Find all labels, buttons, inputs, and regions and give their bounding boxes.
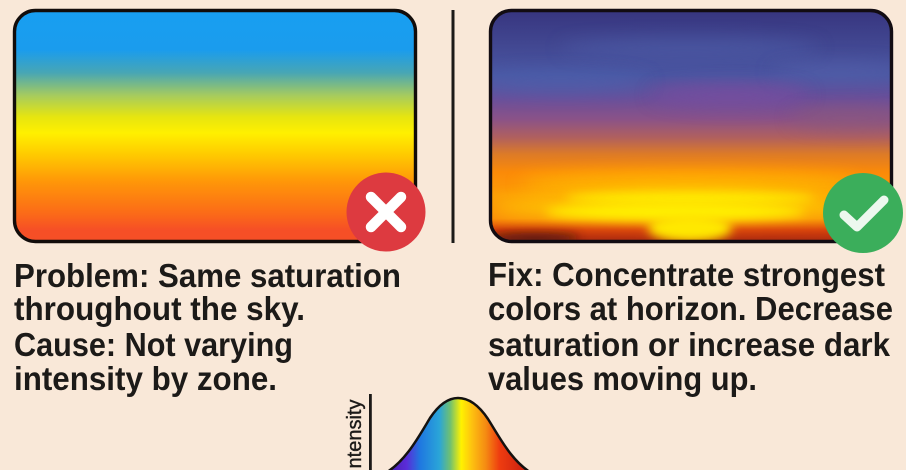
icon: green check badge (823, 173, 903, 253)
text: fix: Fix: Concentrate strongest (488, 256, 885, 293)
panel: problem sky with uniform saturation (14, 10, 416, 242)
text: problem and cause: throughout the sky. (14, 290, 305, 327)
text: problem and cause: intensity by zone. (14, 360, 277, 397)
chart: intensity bell curve with spectrum fill (344, 394, 533, 470)
icon: red cross badge (346, 172, 426, 252)
bell curve (384, 398, 533, 470)
text: fix: values moving up. (488, 360, 757, 397)
text: fix: saturation or increase dark (488, 326, 891, 363)
text: problem and cause (14, 257, 401, 397)
text: problem and cause: Cause: Not varying (14, 326, 293, 363)
text: fix (488, 256, 893, 397)
vertical axis (369, 394, 372, 470)
divider between panels (452, 10, 454, 243)
panel: fixed sunset sky with strongest colours at the horizon (470, 10, 906, 243)
text: problem and cause: Problem: Same saturation (14, 257, 401, 294)
